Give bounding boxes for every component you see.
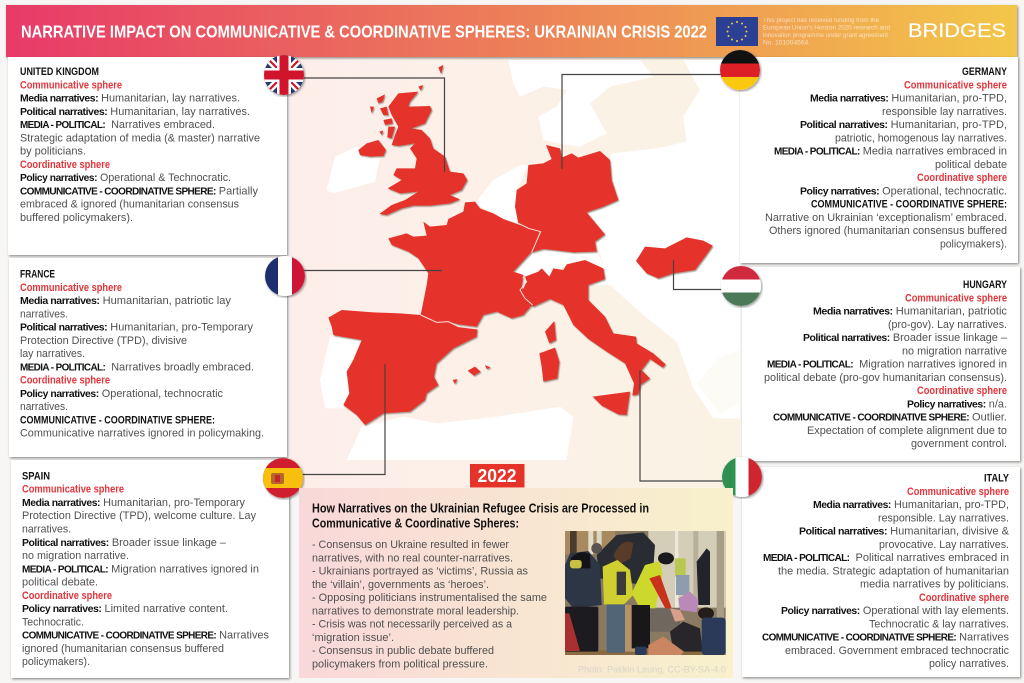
panel: Spain: political debate. <box>22 577 98 589</box>
country: Italian islands <box>539 321 630 415</box>
panel: Spain: policymakers). <box>22 656 90 668</box>
EU funding note <box>763 18 890 46</box>
panel: Hungary: (pro-gov). Lay narratives. <box>888 319 1007 331</box>
summary bullets: ‘migration issue’. <box>312 632 394 644</box>
panel: Italy <box>742 467 1020 677</box>
panel: Hungary: Policy narratives: n/a. <box>907 398 1007 410</box>
panel: France: narratives. <box>20 401 68 413</box>
summary heading: Communicative & Coordinative Spheres: <box>312 516 519 530</box>
summary bullets: narratives, with no real counter-narratives. <box>312 552 513 564</box>
panel: Italy: responsible. Lay narratives. <box>878 512 1009 524</box>
panel: Germany <box>740 57 1018 263</box>
summary heading: How Narratives on the Ukrainian Refugee Crisis are Processed in <box>312 502 649 516</box>
panel: Germany: Communicative sphere <box>904 79 1007 91</box>
panel: France: Political narratives: Humanitarian, pro-Temporary <box>20 322 253 334</box>
EU funding note: innovation programme under grant agreement <box>763 33 888 39</box>
panel: France: Policy narratives: Operational, technocratic <box>20 388 223 400</box>
panel: Germany: Policy narratives: Operational, technocratic. <box>800 185 1007 197</box>
panel: Spain: Media narratives: Humanitarian, pro-Temporary <box>22 497 245 509</box>
panel: United Kingdom: by politicians. <box>20 146 86 158</box>
panel: Spain: SPAIN <box>22 470 50 482</box>
summary bullets: - Consensus on Ukraine resulted in fewer <box>312 539 509 551</box>
map: highlighted countries <box>328 65 713 425</box>
panel: Italy: provocative. Lay narratives. <box>879 539 1009 551</box>
panel: United Kingdom: Media narratives: Humanitarian, lay narratives. <box>20 92 240 104</box>
panel: Spain: no migration narrative. <box>22 550 129 562</box>
panel: Germany: patriotic, homogenous lay narratives. <box>835 132 1007 144</box>
panel: Hungary: Political narratives: Broader issue linkage – <box>803 332 1008 344</box>
summary bullets: - Consensus in public debate buffered <box>312 645 494 657</box>
summary bullets <box>312 539 547 670</box>
logo: BRIDGES: BRIDGES <box>908 20 1006 42</box>
panel: Spain: Policy narratives: Limited narrative content. <box>22 603 228 615</box>
panel: Hungary: Expectation of complete alignment due to <box>807 425 1007 437</box>
panel: Hungary: political debate (pro-gov humanitarian consensus). <box>764 372 1007 384</box>
panel: Hungary: Media narratives: Humanitarian, patriotic <box>813 306 1008 318</box>
header banner <box>6 5 1017 57</box>
country: Balearic islands <box>453 365 491 384</box>
EU funding note: European Union's Horizon 2020 research and <box>763 26 890 32</box>
panel: Hungary: no migration narrative <box>902 345 1007 357</box>
panel: Germany: political debate <box>935 159 1007 171</box>
photo: volunteers helping refugees <box>565 531 726 656</box>
summary bullets: policymakers from political pressure. <box>312 658 488 670</box>
panel: Germany: Narrative on Ukrainian ‘exceptionalism’ embraced. <box>765 212 1007 224</box>
country: Spain <box>328 310 477 425</box>
panel: Hungary: government control. <box>911 438 1007 450</box>
panel: Hungary: HUNGARY <box>963 279 1008 291</box>
country: France <box>388 202 540 327</box>
panel: Hungary: Coordinative sphere <box>917 385 1007 397</box>
panel: Spain: Protection Directive (TPD), welcome culture. Lay <box>22 510 256 522</box>
summary bullets: narratives to demonstrate moral leadership. <box>312 605 519 617</box>
year badge <box>470 464 524 488</box>
icon: German flag <box>720 50 760 91</box>
panel: Spain: Communicative sphere <box>22 484 124 496</box>
panel: United Kingdom: Political narratives: Humanitarian, lay narratives. <box>20 106 250 118</box>
panel: Spain: narratives. <box>22 524 71 536</box>
panel: Italy: policy narratives. <box>929 658 1009 670</box>
panel: Spain <box>11 460 289 678</box>
summary bullets: - Ukrainians portrayed as ‘victims’, Russia as <box>312 566 528 578</box>
panel: France: Protection Directive (TPD), divisive <box>20 335 187 347</box>
panel: France: Communicative sphere <box>20 282 122 294</box>
panel: Germany: Others ignored (humanitarian consensus buffered <box>769 225 1007 237</box>
country: Italy <box>523 260 666 396</box>
panel: Italy: Political narratives: Humanitarian, divisive & <box>799 526 1010 538</box>
panel: Italy: Technocratic & lay narratives. <box>869 618 1009 630</box>
panel: Italy: ITALY <box>984 472 1010 484</box>
icon: Italian flag <box>722 457 762 497</box>
panel: Italy: Media narratives: Humanitarian, pro-TPD, <box>813 499 1009 511</box>
country: Hungary <box>636 237 713 278</box>
panel: Germany: GERMANY <box>962 66 1008 78</box>
panel: Germany: Political narratives: Humanitarian, pro-TPD, <box>800 119 1007 131</box>
panel: Germany: responsible lay narratives. <box>882 106 1007 118</box>
background map <box>290 57 740 490</box>
panel: France: MEDIA - POLITICAL: Narratives broadly embraced. <box>20 361 254 373</box>
leader lines <box>300 74 726 481</box>
panel: Italy: embraced. Government embraced technocratic <box>785 645 1009 657</box>
panel: Italy: media narratives by politicians. <box>860 579 1009 591</box>
panel: United Kingdom: Coordinative sphere <box>20 159 110 171</box>
panel: France: lay narratives. <box>20 348 85 360</box>
icon: Hungarian flag <box>721 266 761 306</box>
panel: Germany: MEDIA - POLITICAL: Media narratives embraced in <box>774 146 1007 158</box>
panel: Spain: MEDIA - POLITICAL: Migration narratives ignored in <box>22 563 259 575</box>
panel: United Kingdom: buffered policymakers). <box>20 212 133 224</box>
panel: Hungary <box>742 267 1020 461</box>
panel: United Kingdom <box>8 57 287 255</box>
panel: United Kingdom: UNITED KINGDOM <box>20 66 99 78</box>
summary heading <box>312 502 649 530</box>
panel: France: FRANCE <box>20 269 55 281</box>
title: NARRATIVE IMPACT ON COMMUNICATIVE & COORDINATIVE SPHERES: UKRAINIAN CRISIS 2022 <box>21 22 707 42</box>
photo credit: Photo: Pakkin Leung, CC-BY-SA-4.0 <box>578 664 726 676</box>
panel: Spain: Political narratives: Broader issue linkage – <box>22 537 227 549</box>
panel: Germany: Media narratives: Humanitarian, pro-TPD, <box>810 92 1007 104</box>
panel: Hungary: Communicative sphere <box>905 292 1007 304</box>
panel: Italy: COMMUNICATIVE - COORDINATIVE SPHERE: Narratives <box>762 632 1009 644</box>
icon: UK flag <box>264 55 304 95</box>
summary bullets: - Crisis was not necessarily perceived as a <box>312 618 513 630</box>
panel: United Kingdom: Communicative sphere <box>20 79 122 91</box>
panel: France: Media narratives: Humanitarian, patriotic lay <box>20 295 231 307</box>
panel: United Kingdom: MEDIA - POLITICAL: Narratives embraced. <box>20 119 215 131</box>
panel: United Kingdom: embraced & ignored (humanitarian consensus <box>20 199 239 211</box>
panel: Hungary: MEDIA - POLITICAL: Migration narratives ignored in <box>767 359 1007 371</box>
country: Germany <box>515 145 618 252</box>
panel: United Kingdom: COMMUNICATIVE - COORDINATIVE SPHERE: Partially <box>20 185 258 197</box>
panel: United Kingdom: Policy narratives: Operational & Technocratic. <box>20 172 231 184</box>
EU funding note: No. 101004564. <box>763 40 810 46</box>
panel: France: Coordinative sphere <box>20 375 110 387</box>
panel: Germany: Coordinative sphere <box>917 172 1007 184</box>
panel: France <box>9 258 287 457</box>
year badge: 2022 <box>478 466 516 486</box>
panel: Italy: Coordinative sphere <box>919 592 1009 604</box>
panel: Spain: COMMUNICATIVE - COORDINATIVE SPHERE: Narratives <box>22 630 269 642</box>
panel: Spain: ignored (humanitarian consensus buffered <box>22 643 224 655</box>
panel: summary box <box>299 488 733 678</box>
panel: France: Communicative narratives ignored in policymaking. <box>20 428 264 440</box>
summary bullets: the ‘villain’, governments as ‘heroes’. <box>312 579 489 591</box>
country: United Kingdom <box>358 65 467 215</box>
icon: French flag <box>265 256 305 296</box>
panel: France: narratives. <box>20 308 68 320</box>
panel: Germany: policymakers). <box>940 238 1007 250</box>
panel: Italy: the media. Strategic adaptation of humanitarian <box>778 565 1009 577</box>
panel: Italy: Policy narratives: Operational with lay elements. <box>781 605 1009 617</box>
panel: United Kingdom: Strategic adaptation of media (& master) narrative <box>20 132 260 144</box>
panel: Italy: MEDIA - POLITICAL: Political narratives embraced in <box>763 552 1009 564</box>
icon: EU flag <box>716 17 758 46</box>
panel: France: COMMUNICATIVE - COORDINATIVE SPHERE: <box>20 414 215 426</box>
icon: Spanish flag <box>263 458 303 498</box>
panel: Spain: Coordinative sphere <box>22 590 112 602</box>
panel: Spain: Technocratic. <box>22 616 84 628</box>
summary bullets: - Opposing politicians instrumentalised the same <box>312 592 547 604</box>
panel: Hungary: COMMUNICATIVE - COORDINATIVE SPHERE: Outlier. <box>773 412 1007 424</box>
EU funding note: This project has received funding from the <box>763 18 880 24</box>
